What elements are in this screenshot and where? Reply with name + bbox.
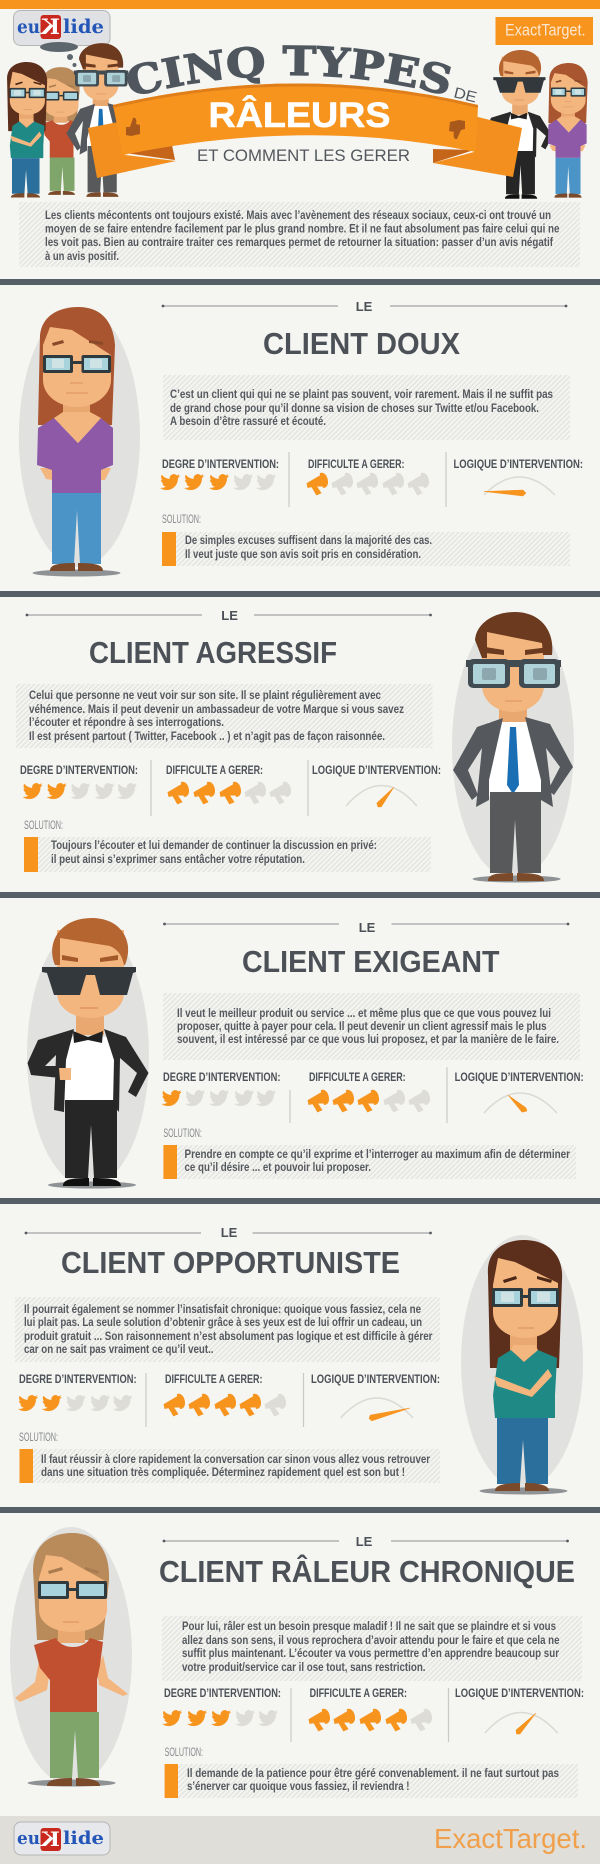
- figure: man suit: [453, 612, 573, 881]
- stat: degre d'intervention: [160, 457, 279, 490]
- stat: degre d'intervention: DEGRE D’INTERVENTION:: [20, 763, 138, 777]
- intro panel: à un avis positif.: [45, 251, 119, 263]
- stat: difficulte a gerer: DIFFICULTE A GERER:: [166, 763, 263, 777]
- stat: difficulte a gerer: [305, 457, 431, 497]
- solution label: SOLUTION:: [162, 512, 201, 526]
- shadow: [32, 570, 120, 576]
- logo: euklide: lide: [63, 16, 104, 38]
- stat: logique d'intervention gauge: [455, 1686, 584, 1734]
- stat: difficulte a gerer: [162, 1372, 288, 1418]
- solution block: [165, 1764, 578, 1798]
- section divider 5: [0, 1507, 600, 1513]
- description panel: car on ne sait pas vraiment ce qu’il veut..: [24, 1344, 214, 1356]
- stat: degre d'intervention: DEGRE D’INTERVENTION:: [162, 457, 279, 471]
- stat: degre d'intervention: DEGRE D’INTERVENTION:: [19, 1372, 137, 1386]
- shadow: [480, 1488, 568, 1494]
- description panel: de grand chose pour qu’il donne sa vision de choses sur Twitte et/ou Facebook.: [170, 403, 539, 415]
- shadow: [48, 1182, 136, 1188]
- heading: CLIENT AGRESSIF: [89, 635, 337, 670]
- le rule: LE: [359, 920, 376, 935]
- description panel: A besoin d’être rassuré et écouté.: [170, 416, 326, 428]
- solution block: [24, 837, 431, 872]
- stat: logique d'intervention gauge: [454, 457, 583, 496]
- footer: [0, 1816, 600, 1864]
- section: client opportuniste: [15, 1225, 583, 1494]
- thought cloud: [40, 42, 78, 67]
- stat: logique d'intervention gauge: [312, 763, 441, 807]
- stat: difficulte a gerer: DIFFICULTE A GERER:: [308, 457, 404, 471]
- solution label: SOLUTION:: [24, 818, 63, 832]
- stat: logique d'intervention gauge: LOGIQUE D’INTERVENTION:: [311, 1372, 440, 1386]
- solution block: [162, 532, 570, 566]
- logo: euklide: K: [40, 14, 60, 39]
- description panel: Il est présent partout ( Twitter, Facebook .. ) et n’agit pas de façon raisonnée.: [29, 731, 385, 743]
- solution block: il peut ainsi s’exprimer sans entâcher votre réputation.: [51, 854, 305, 866]
- logo: euklide footer: [14, 1822, 110, 1855]
- description panel: [163, 993, 580, 1060]
- section: client raleur chronique: [10, 1527, 584, 1798]
- figure: girl purple: [37, 307, 115, 571]
- stat: degre d'intervention: [162, 1686, 281, 1726]
- solution label: SOLUTION:: [163, 1126, 202, 1140]
- icon: thumb up: [126, 118, 140, 136]
- logo: ExactTarget box: ExactTarget.: [505, 20, 586, 40]
- le rule: LE: [221, 1225, 238, 1240]
- subtitle: ET COMMENT LES GERER: [197, 146, 410, 165]
- logo: euklide: eu: [17, 16, 40, 38]
- solution label: SOLUTION:: [19, 1430, 58, 1444]
- section divider 1: [0, 279, 600, 285]
- stat: logique d'intervention gauge: [455, 1070, 584, 1113]
- solution block: Il faut réussir à clore rapidement la conversation car sinon vous allez vous retrouver: [41, 1454, 430, 1466]
- arms: [15, 1655, 128, 1702]
- heading: CLIENT OPPORTUNISTE: [61, 1245, 400, 1280]
- solution block: Il veut juste que son avis soit pris en considération.: [185, 549, 421, 561]
- solution block: s’énerver car quoique vous fassiez, il reviendra !: [187, 1781, 410, 1793]
- stat: logique d'intervention gauge: LOGIQUE D’INTERVENTION:: [312, 763, 441, 777]
- section divider 3: [0, 892, 600, 898]
- stat: difficulte a gerer: [166, 763, 293, 806]
- stat: difficulte a gerer: [307, 1686, 434, 1733]
- heading: CLIENT EXIGEANT: [242, 944, 500, 979]
- heading: CLIENT RÂLEUR CHRONIQUE: [159, 1553, 575, 1589]
- section: client exigeant: [27, 918, 584, 1188]
- footer band: [0, 1816, 600, 1864]
- stat: difficulte a gerer: DIFFICULTE A GERER:: [309, 1070, 406, 1084]
- solution block: dans une situation très compliquée. Déterminez rapidement quel est son but !: [41, 1467, 405, 1479]
- solution block: [163, 1145, 576, 1179]
- description panel: [15, 1297, 440, 1362]
- backdrop ellipse: [19, 307, 140, 567]
- description panel: [163, 375, 570, 440]
- stat: difficulte a gerer: DIFFICULTE A GERER:: [165, 1372, 262, 1386]
- logo: ExactTarget box: [496, 17, 593, 45]
- stat: degre d'intervention: [20, 763, 138, 799]
- le rule: LE: [356, 1534, 373, 1549]
- le rule: LE: [356, 299, 373, 314]
- shadow: [473, 876, 561, 882]
- logo: euklide: [14, 10, 110, 46]
- intro panel: [19, 202, 580, 267]
- body: [33, 1533, 109, 1786]
- backdrop ellipse: [27, 923, 149, 1187]
- logo: euklide footer: K: [40, 1827, 60, 1851]
- stat: difficulte a gerer: DIFFICULTE A GERER:: [310, 1686, 407, 1700]
- top orange bar: [0, 0, 600, 9]
- backdrop ellipse: [10, 1527, 132, 1785]
- shadow: [28, 1780, 116, 1786]
- solution block: ce qu’il désire ... et pouvoir lui proposer.: [184, 1162, 371, 1174]
- stat: degre d'intervention: [162, 1070, 280, 1106]
- ribbon banner: [88, 84, 522, 178]
- description panel: votre produit/service car il ose tout, sans restriction.: [182, 1662, 426, 1674]
- logo: euklide footer: eu: [17, 1828, 40, 1849]
- description panel: [16, 684, 432, 748]
- logo: euklide footer: lide: [63, 1828, 104, 1849]
- solution block: [20, 1449, 440, 1483]
- figure: header girl purple: [548, 63, 588, 198]
- stat: logique d'intervention gauge: [311, 1372, 440, 1421]
- description panel: l’écouter et répondre à ses interrogations.: [29, 717, 224, 729]
- figure: man tuxedo: [28, 918, 148, 1186]
- section divider 4: [0, 1198, 600, 1204]
- description panel: Il pourrait également se nommer l’insatisfait chronique: quoique vous fassiez, cela ne: [24, 1304, 421, 1316]
- solution block: Toujours l’écouter et lui demander de continuer la discussion en privé:: [51, 840, 377, 852]
- figure: girl red top: [15, 1533, 128, 1786]
- description panel: véhémence. Mais il peut devenir un ambassadeur de votre Marque si vous savez: [29, 704, 404, 716]
- stat: degre d'intervention: DEGRE D’INTERVENTION:: [164, 1686, 281, 1700]
- figure: header girl red: [41, 67, 80, 195]
- figure: header man tuxedo: [485, 50, 552, 199]
- le rule: LE: [221, 608, 238, 623]
- section: client doux: [19, 299, 583, 576]
- section: client agressif: [16, 608, 574, 882]
- description panel: lui plait pas. La seule solution d’obtenir grâce à ses yeux est de lui offrir un cadeau, un: [24, 1317, 422, 1329]
- heading: CLIENT DOUX: [263, 326, 460, 361]
- description panel: Celui que personne ne veut voir sur son site. Il se plaint régulièrement avec: [29, 690, 382, 702]
- section divider 2: [0, 591, 600, 597]
- stat: degre d'intervention: DEGRE D’INTERVENTION:: [163, 1070, 280, 1084]
- title: de: DE: [452, 84, 478, 106]
- logo: ExactTarget footer: ExactTarget.: [434, 1823, 587, 1854]
- header: [7, 10, 593, 267]
- description panel: proposer, quitte à payer pour cela. Il peut devenir un client agressif mais le plus: [177, 1021, 546, 1033]
- title: cinq types: CINQ TYPES: [128, 45, 451, 94]
- stat: degre d'intervention: [18, 1372, 137, 1411]
- backdrop ellipse: [461, 1235, 583, 1489]
- backdrop ellipse: [452, 613, 574, 879]
- figure: header man suit: [66, 43, 135, 197]
- solution block: De simples excuses suffisent dans la majorité des cas.: [185, 535, 432, 547]
- title: raleurs: RÂLEURS: [208, 95, 390, 135]
- icon: thumb down: [449, 120, 465, 139]
- figure: header girl teal: [7, 62, 47, 198]
- figure: girl teal: [488, 1240, 562, 1491]
- solution label: SOLUTION:: [165, 1745, 203, 1759]
- description panel: produit gratuit ... Son raisonnement n’est absolument pas logique et est difficile à gérer: [24, 1331, 433, 1343]
- stat: difficulte a gerer: [306, 1070, 432, 1114]
- description panel: [162, 1616, 582, 1681]
